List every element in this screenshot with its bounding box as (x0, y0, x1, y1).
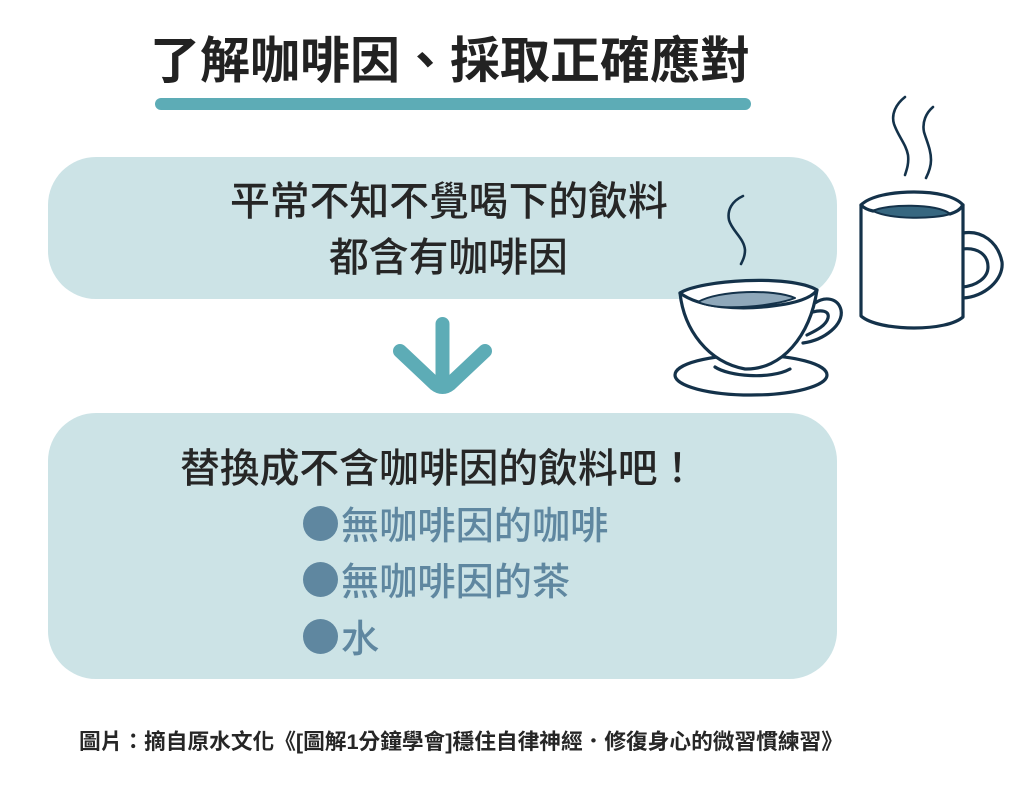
panel: everyday drinks (48, 157, 837, 299)
bullet: water (303, 618, 379, 661)
icon: teacup (680, 280, 841, 369)
bullet: decaf coffee: 無咖啡因的咖啡 (341, 505, 608, 548)
panel text: everyday drinks line 2: 都含有咖啡因 (329, 236, 568, 280)
bullet: decaf tea: 無咖啡因的茶 (341, 561, 570, 604)
icon: mug (861, 192, 1002, 328)
panel text: everyday drinks line 1: 平常不知不覺喝下的飲料 (230, 180, 668, 224)
bullet: water: 水 (341, 618, 379, 661)
title: 了解咖啡因、採取正確應對 (150, 33, 750, 89)
panel: replacement drinks (48, 413, 837, 679)
icon: mug steam (893, 97, 933, 178)
title underline (155, 98, 751, 110)
icon: coffee cups (673, 96, 1004, 397)
arrow: down (393, 317, 492, 394)
source credit: 圖片：摘自原水文化《[圖解1分鐘學會]穩住自律神經．修復身心的微習慣練習》 (79, 729, 843, 754)
icon: cup steam (729, 196, 745, 264)
panel heading: replace drinks: 替換成不含咖啡因的飲料吧！ (180, 447, 697, 491)
icon: saucer (675, 355, 827, 395)
